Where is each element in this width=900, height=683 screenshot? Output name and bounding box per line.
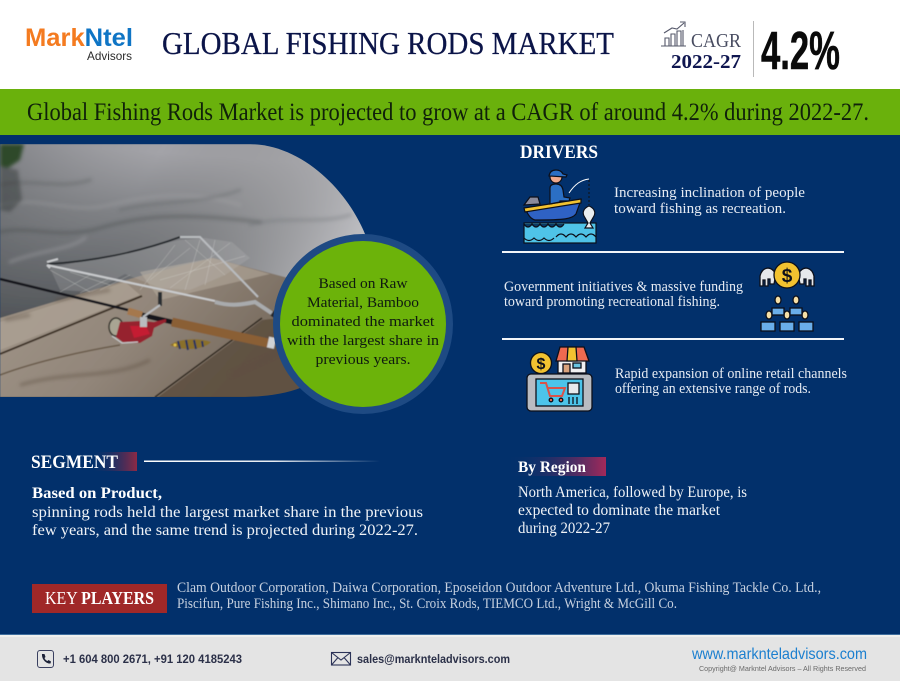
segment text: Based on Product, xyxy=(32,485,162,502)
website: www.marknteladvisors.com xyxy=(691,646,867,663)
segment text: few years, and the same trend is projected during 2022-27. xyxy=(32,522,418,539)
region text: North America, followed by Europe, is xyxy=(518,484,747,501)
callout: raw material: dominated the market xyxy=(292,314,435,330)
heading: by region xyxy=(480,457,606,476)
driver 3 text xyxy=(615,366,847,397)
landing net xyxy=(47,237,285,322)
driver 3 text: offering an extensive range of rods. xyxy=(615,381,811,397)
callout: raw material xyxy=(273,234,453,414)
heading: drivers: DRIVERS xyxy=(520,142,598,163)
driver 1 text xyxy=(614,185,805,217)
segment text xyxy=(32,485,423,539)
key players list: Piscifun, Pure Fishing Inc., Shimano Inc., St. Croix Rods, TIEMCO Ltd., Wright & McGill Co. xyxy=(177,596,677,612)
copyright: Copyright@ Markntel Advisors – All Rights Reserved xyxy=(699,664,866,673)
photo: fishing rod and net on a dock xyxy=(0,144,370,398)
navy main panel xyxy=(0,135,900,634)
green summary banner xyxy=(0,89,900,135)
fishing reel xyxy=(109,317,166,343)
icon: funding coin above people xyxy=(760,262,814,331)
heading: segment: SEGMENT xyxy=(31,452,118,473)
CAGR value: 4.2% xyxy=(761,21,840,81)
key players list xyxy=(177,580,821,612)
callout: raw material: Material, Bamboo xyxy=(307,295,419,311)
heading: by region: By Region xyxy=(518,459,586,476)
driver 1 text: Increasing inclination of people xyxy=(614,185,805,201)
dark shoreline foliage xyxy=(0,144,24,212)
phone numbers: +1 604 800 2671, +91 120 4185243 xyxy=(63,654,242,666)
driver 1 text: toward fishing as recreation. xyxy=(614,201,786,217)
title: GLOBAL FISHING RODS MARKET xyxy=(162,25,614,61)
driver 2 text xyxy=(504,279,743,310)
driver 2 text: Government initiatives & massive funding xyxy=(504,279,743,295)
fishing rod and cork handle xyxy=(0,279,275,344)
segment text: spinning rods held the largest market share in the previous xyxy=(32,504,423,521)
driver 2 text: toward promoting recreational fishing. xyxy=(504,294,720,310)
wooden dock planks xyxy=(0,258,310,397)
logo: MarkNtel Advisors: Advisors xyxy=(87,49,132,63)
callout: raw material: previous years. xyxy=(316,352,410,368)
icon: phone xyxy=(38,650,54,668)
icon: online retail on a tablet: $ xyxy=(537,356,546,373)
CAGR label: CAGR xyxy=(691,30,742,52)
key players list: Clam Outdoor Corporation, Daiwa Corporation, Eposeidon Outdoor Adventure Ltd., Okuma Fishing Tackle Co. Ltd., xyxy=(177,580,821,596)
region text xyxy=(518,484,747,537)
key players label: KEY PLAYERS xyxy=(45,588,154,608)
region text: during 2022-27 xyxy=(518,520,610,537)
icon: online retail on a tablet xyxy=(527,347,592,411)
email address: sales@marknteladvisors.com xyxy=(357,654,510,666)
key players label xyxy=(32,584,167,613)
CAGR period: 2022-27 xyxy=(671,51,741,73)
icon: angler on a boat xyxy=(524,170,596,243)
icon: email envelope xyxy=(332,652,350,665)
callout: raw material: with the largest share in xyxy=(287,333,440,349)
icon: growth chart xyxy=(661,22,686,46)
logo: MarkNtel Advisors: MarkNtel xyxy=(25,24,133,52)
callout: raw material: Based on Raw xyxy=(318,276,408,292)
region text: expected to dominate the market xyxy=(518,502,721,519)
fishing lure xyxy=(170,339,211,350)
footer bar xyxy=(0,634,900,681)
driver 3 text: Rapid expansion of online retail channels xyxy=(615,366,847,382)
icon: funding coin above people: $ xyxy=(782,266,793,287)
CAGR badge xyxy=(661,21,840,81)
